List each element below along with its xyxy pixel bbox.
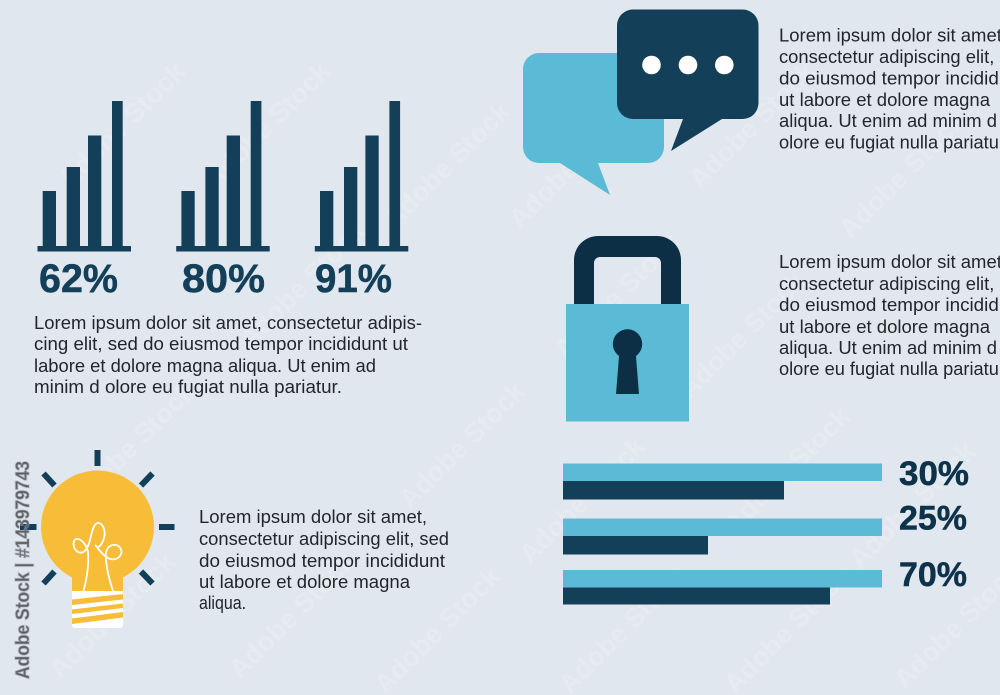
text block: speech description: Lorem ipsum dolor sit amet, [779, 26, 1000, 46]
text block: padlock description: olore eu fugiat nulla pariatur. [779, 359, 1000, 379]
light speech bubble [523, 53, 664, 195]
horizontal bars: 25%: 25% [899, 500, 967, 538]
text: Adobe Stock [683, 56, 822, 194]
text block: chart description [34, 313, 422, 397]
text: Adobe Stock [833, 106, 972, 244]
text: Adobe Stock [53, 56, 192, 194]
icon: speech bubbles [523, 10, 758, 195]
horizontal bars: 25% [563, 500, 967, 554]
icon: light bulb [20, 450, 174, 628]
text: Adobe Stock [63, 376, 202, 514]
horizontal bars: 30% [563, 455, 969, 500]
text block: chart description: minim d olore eu fugiat nulla pariatur. [34, 377, 342, 397]
text block: light bulb description: Lorem ipsum dolor sit amet, [199, 507, 427, 527]
text block: light bulb description: consectetur adipiscing elit, sed [199, 529, 449, 549]
text: Adobe Stock [393, 376, 532, 514]
text block: light bulb description: aliqua. [199, 593, 246, 613]
stock watermark label: Adobe Stock | #143979743 [13, 461, 34, 679]
bar chart: 62% [38, 101, 131, 301]
text block: padlock description [779, 252, 1000, 379]
text: Adobe Stock [43, 546, 182, 684]
text block: speech description: aliqua. Ut enim ad minim d [779, 111, 997, 131]
text: Adobe Stock [718, 401, 857, 539]
text: Adobe Stock [378, 96, 517, 234]
text block: padlock description: aliqua. Ut enim ad minim d [779, 338, 997, 358]
text block: padlock description: ut labore et dolore magna [779, 317, 991, 337]
text block: padlock description: Lorem ipsum dolor sit amet, [779, 252, 1000, 272]
text: Adobe Stock [513, 431, 652, 569]
bar chart: 80% [176, 101, 270, 301]
text block: chart description: cing elit, sed do eiusmod tempor incididunt ut [34, 334, 408, 354]
bar chart: 62%: 62% [39, 257, 118, 301]
text: Adobe Stock [503, 96, 642, 234]
text block: chart description: labore et dolore magna aliqua. Ut enim ad [34, 356, 376, 376]
text block: light bulb description: do eiusmod tempor incididunt [199, 551, 445, 571]
text: Adobe Stock [223, 546, 362, 684]
bar chart: 91%: 91% [315, 257, 392, 301]
horizontal bars: 70%: 70% [899, 556, 967, 594]
text: Adobe Stock [843, 436, 982, 574]
text block: speech description: olore eu fugiat nulla pariatur. [779, 132, 1000, 152]
icon: padlock [566, 236, 689, 422]
text block: speech description [779, 26, 1000, 152]
three dots [642, 56, 734, 74]
horizontal bars: 30%: 30% [899, 455, 969, 493]
text: Adobe Stock [673, 266, 812, 404]
text block: chart description: Lorem ipsum dolor sit amet, consectetur adipis- [34, 313, 422, 333]
text: Adobe Stock [548, 226, 687, 364]
dark speech bubble [617, 10, 758, 151]
text block: light bulb description [199, 507, 449, 613]
text block: light bulb description: ut labore et dolore magna [199, 572, 411, 592]
text block: speech description: ut labore et dolore magna [779, 90, 991, 110]
text: Adobe Stock [233, 216, 372, 354]
bar chart: 91% [315, 101, 408, 301]
horizontal bars: 70% [563, 556, 967, 604]
bar chart: 80%: 80% [182, 257, 265, 301]
text: Adobe Stock [198, 56, 337, 194]
